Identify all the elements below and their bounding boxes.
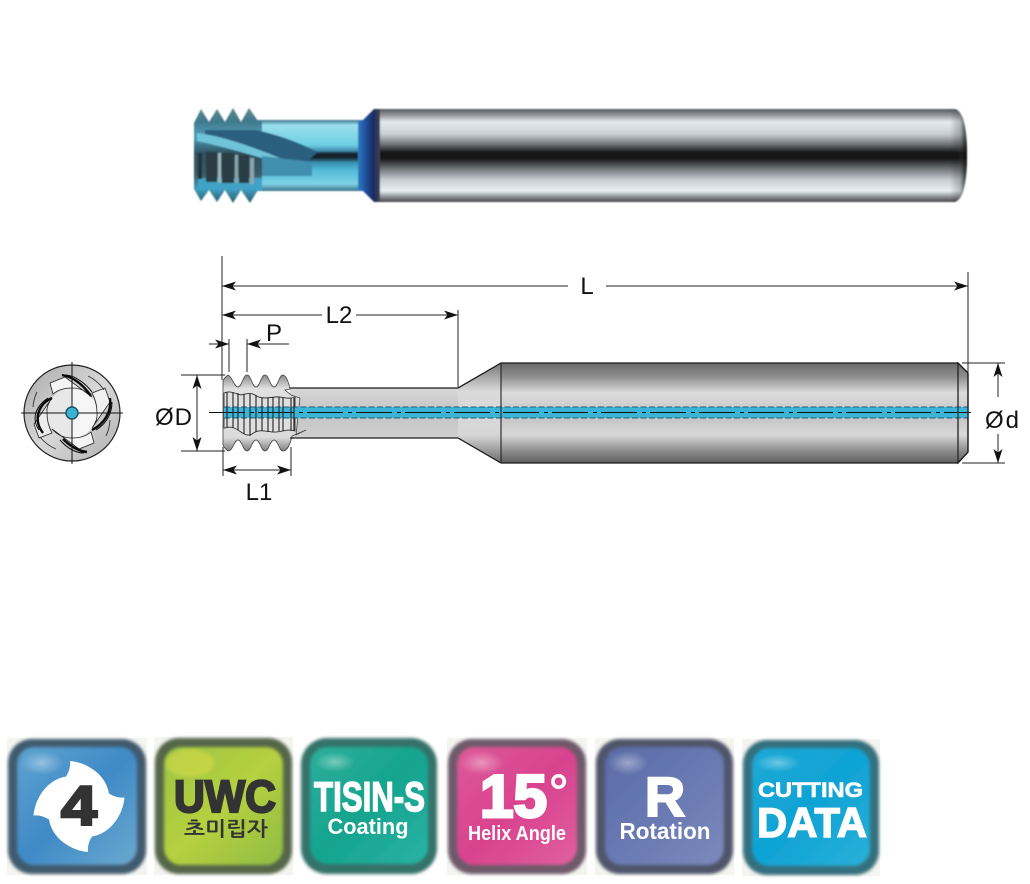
coating label: Coating bbox=[328, 814, 408, 839]
neck bbox=[290, 388, 458, 438]
thread body bbox=[223, 375, 306, 451]
photo: coated thread mill bbox=[194, 108, 968, 203]
badge: TISIN-S coating bbox=[301, 738, 437, 874]
blade relief faces bbox=[34, 377, 110, 449]
badge: 4 flutes bbox=[7, 738, 147, 875]
korean subtitle: 초미립자 bbox=[184, 819, 268, 841]
label diameter d: Ød bbox=[985, 407, 1019, 434]
coating name: TISIN-S bbox=[314, 773, 425, 820]
badge: cutting data bbox=[742, 739, 880, 876]
badge: rotation bbox=[595, 738, 734, 875]
degree sign: ° bbox=[549, 766, 568, 819]
icon: four flute cutter bbox=[34, 761, 124, 852]
data label: DATA bbox=[757, 799, 867, 846]
dimension L bbox=[222, 285, 968, 287]
shank chamfer bbox=[958, 363, 968, 463]
badge: UWC bbox=[154, 737, 293, 875]
label L: L bbox=[580, 273, 594, 300]
UWC title: UWC bbox=[174, 771, 276, 822]
dimension P bbox=[209, 343, 229, 345]
dimension D bbox=[196, 375, 198, 451]
dashed coolant edges bbox=[224, 407, 968, 418]
centre line bbox=[209, 412, 971, 414]
dimension L1 bbox=[223, 469, 291, 471]
flute edges bbox=[35, 375, 112, 453]
cone bbox=[458, 363, 501, 463]
flute lines bbox=[227, 392, 294, 436]
centre lines bbox=[21, 362, 123, 464]
coolant channel bbox=[224, 407, 968, 418]
number of flutes: 4 bbox=[61, 774, 97, 837]
label diameter D: ØD bbox=[155, 404, 192, 431]
helix label: Helix Angle bbox=[468, 823, 566, 845]
dimension lines bbox=[181, 256, 1005, 476]
end view of cutter bbox=[21, 362, 123, 464]
outlines bbox=[290, 363, 968, 463]
side view technical drawing bbox=[209, 363, 971, 463]
label L2: L2 bbox=[326, 302, 352, 329]
label L1: L1 bbox=[246, 479, 272, 506]
dimension labels bbox=[155, 273, 1019, 506]
label P: P bbox=[266, 320, 282, 347]
dimension d bbox=[997, 363, 999, 397]
margin arcs bbox=[33, 376, 110, 449]
rotation label: Rotation bbox=[620, 818, 710, 844]
coolant hole bbox=[66, 407, 78, 419]
helix angle value: 15 bbox=[480, 763, 547, 830]
rotation letter: R bbox=[645, 765, 685, 828]
dimension L2 bbox=[222, 314, 458, 316]
badge: helix angle bbox=[447, 738, 587, 875]
shank bbox=[501, 363, 958, 463]
flute region bbox=[224, 392, 295, 435]
cutting label: CUTTING bbox=[758, 779, 863, 802]
